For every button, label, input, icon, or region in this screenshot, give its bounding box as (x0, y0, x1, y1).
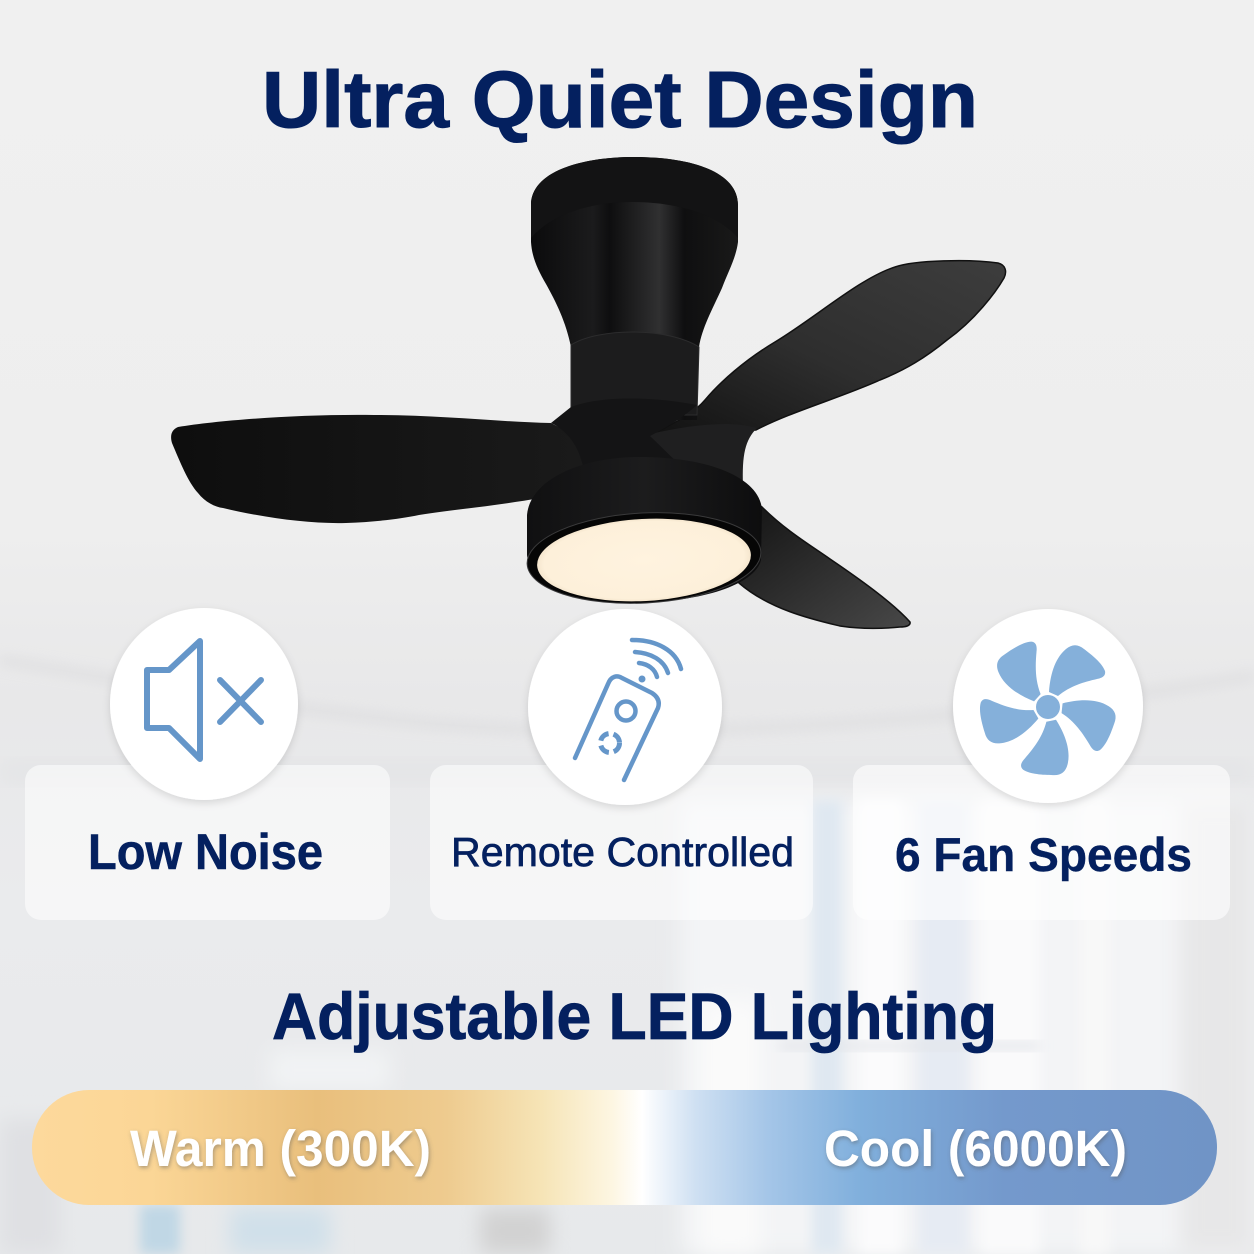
icon circle: fan (953, 609, 1143, 803)
blade: rear lower right (739, 507, 910, 628)
label: low noise: Low Noise (88, 824, 323, 880)
icon: five-blade fan (965, 634, 1124, 791)
label: fan speeds: 6 Fan Speeds (895, 828, 1192, 881)
card: low noise (25, 608, 390, 920)
icon circle: low noise (110, 608, 298, 800)
colour temperature bar (32, 1090, 1217, 1205)
blade hub (551, 398, 697, 478)
card: fan speeds (853, 609, 1230, 920)
title: Ultra Quiet Design (262, 55, 978, 144)
card: remote controlled (430, 609, 813, 920)
label: warm: Warm (300K) (130, 1120, 431, 1177)
light housing (527, 457, 762, 602)
icon: remote control with signal (575, 640, 681, 780)
LED light panel (535, 513, 753, 607)
motor collar (571, 332, 699, 415)
blade: left (171, 415, 585, 523)
blade: upper right (655, 261, 1006, 433)
canopy and neck (531, 157, 738, 420)
icon circle: remote (528, 609, 722, 805)
heading: adjustable LED lighting: Adjustable LED Lighting (272, 979, 997, 1053)
label: remote controlled: Remote Controlled (451, 829, 794, 875)
right hub arm (640, 424, 757, 485)
ceiling fan product (171, 157, 1006, 628)
housing rim (525, 507, 763, 609)
icon: muted speaker (147, 641, 261, 759)
canopy top cap (531, 157, 738, 238)
label: cool: Cool (6000K) (824, 1120, 1127, 1177)
